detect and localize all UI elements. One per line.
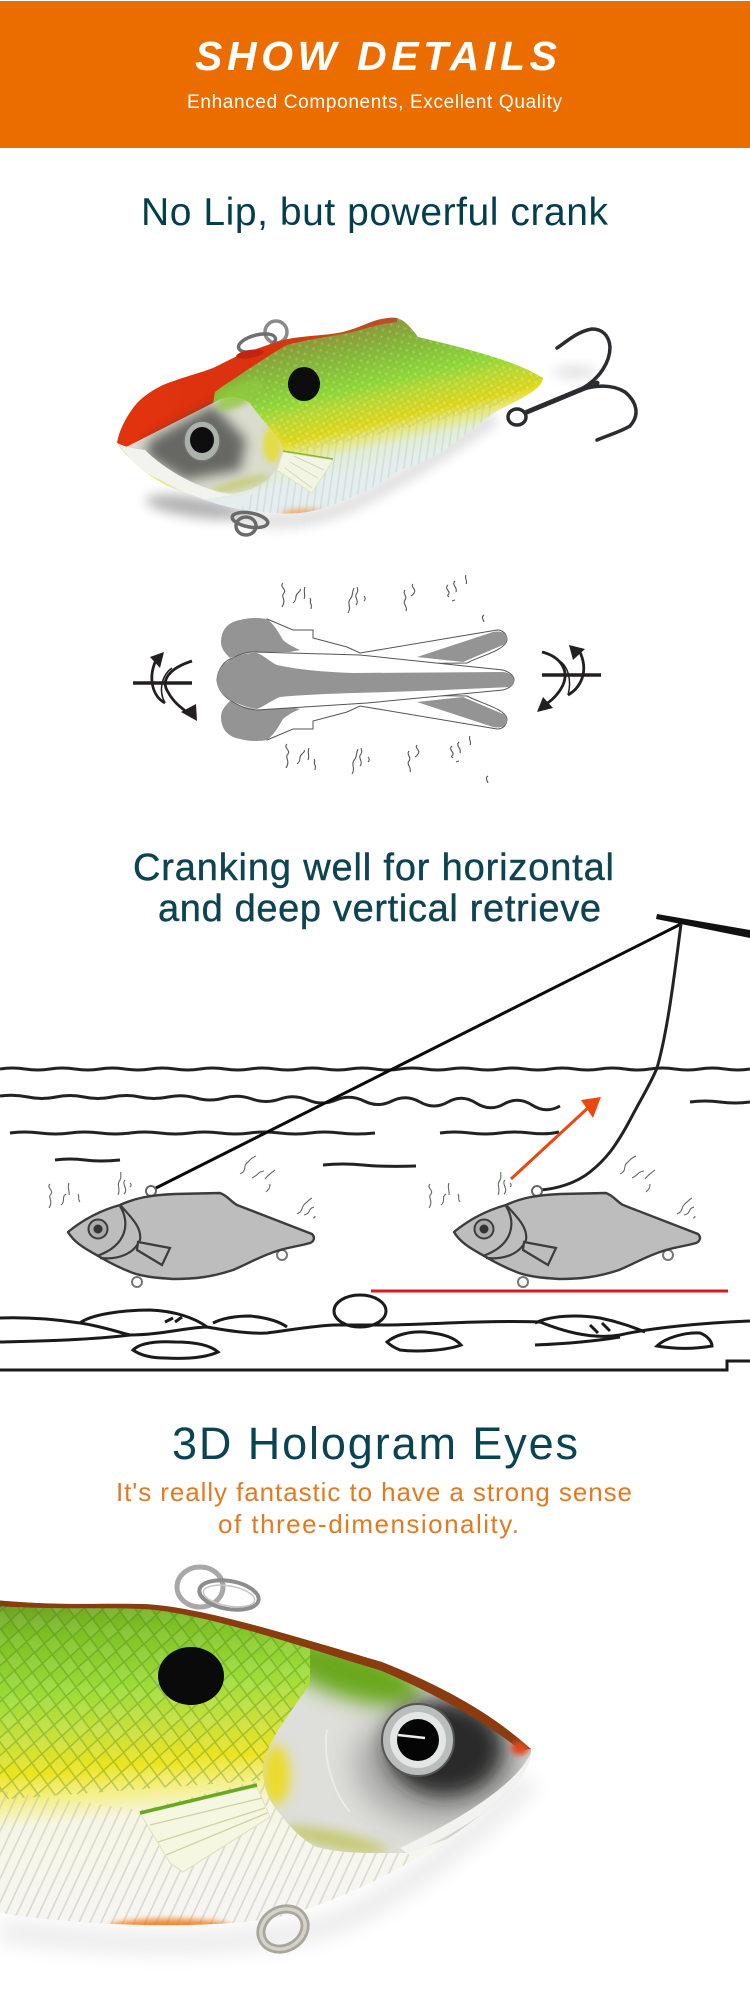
vibration marks below (286, 736, 488, 783)
red nose (511, 1741, 529, 1755)
right rotation arrows (537, 645, 601, 712)
heading: no lip: No Lip, but powerful crank (141, 191, 608, 234)
heading line 1: Cranking well for horizontal (133, 847, 614, 889)
left lure drawing (68, 1186, 314, 1287)
hook shadow (553, 366, 597, 378)
centre position (217, 652, 514, 710)
right lure drawing (454, 1186, 700, 1287)
nose white (117, 443, 233, 500)
photo: lure close-up (0, 1567, 545, 1957)
diagram: retrieve scene (0, 914, 750, 1370)
red ring base (236, 348, 264, 360)
header subtitle: Enhanced Components, Excellent Quality (187, 92, 562, 113)
top split ring (177, 1567, 261, 1614)
fishing line to right lure (540, 924, 681, 1190)
side spot (288, 367, 320, 401)
close-up side spot (158, 1647, 224, 1705)
photo: lure side view (110, 310, 636, 535)
top split ring (237, 321, 287, 356)
bottom split ring (231, 510, 269, 535)
bottom ring (254, 1901, 312, 1957)
left rotation arrows (133, 652, 197, 721)
hologram eye (382, 1704, 454, 1776)
fishing rod (656, 914, 750, 938)
lure body (110, 310, 550, 520)
red depth line (371, 1290, 728, 1292)
belly orange (106, 1914, 234, 1926)
lure eye (184, 421, 220, 461)
treble hook (508, 329, 636, 440)
heading line 2: and deep vertical retrieve (158, 888, 601, 930)
fishing line to left lure (146, 924, 681, 1193)
close-up body (0, 1590, 545, 1940)
water lines (0, 1068, 750, 1166)
lower swing position (221, 695, 507, 741)
close-up shadow (0, 1780, 530, 1942)
heading: 3D eyes: 3D Hologram Eyes (172, 1418, 578, 1469)
belly orange (281, 509, 329, 519)
red head cap (117, 318, 397, 450)
vibration marks above (282, 575, 484, 622)
upper swing position (221, 618, 507, 664)
diagram: wobble from above (133, 575, 601, 783)
orange direction arrow (511, 1097, 601, 1179)
right lure vibration marks (429, 1156, 695, 1218)
pectoral fin (277, 452, 333, 493)
head (120, 397, 283, 493)
river bed (0, 1295, 750, 1370)
description line 2: of three-dimensionality. (218, 1509, 519, 1539)
description (116, 1477, 632, 1539)
head shadow (144, 490, 246, 524)
description line 1: It's really fantastic to have a strong sense (116, 1477, 632, 1507)
close-up head (262, 1640, 531, 1853)
belly shadow (240, 417, 495, 521)
header title: SHOW DETAILS (195, 33, 557, 79)
left lure vibration marks (49, 1156, 315, 1218)
header band (0, 1, 750, 148)
red-brown top edge (0, 1600, 531, 1750)
fin (140, 1787, 270, 1872)
heading: cranking (133, 847, 614, 930)
